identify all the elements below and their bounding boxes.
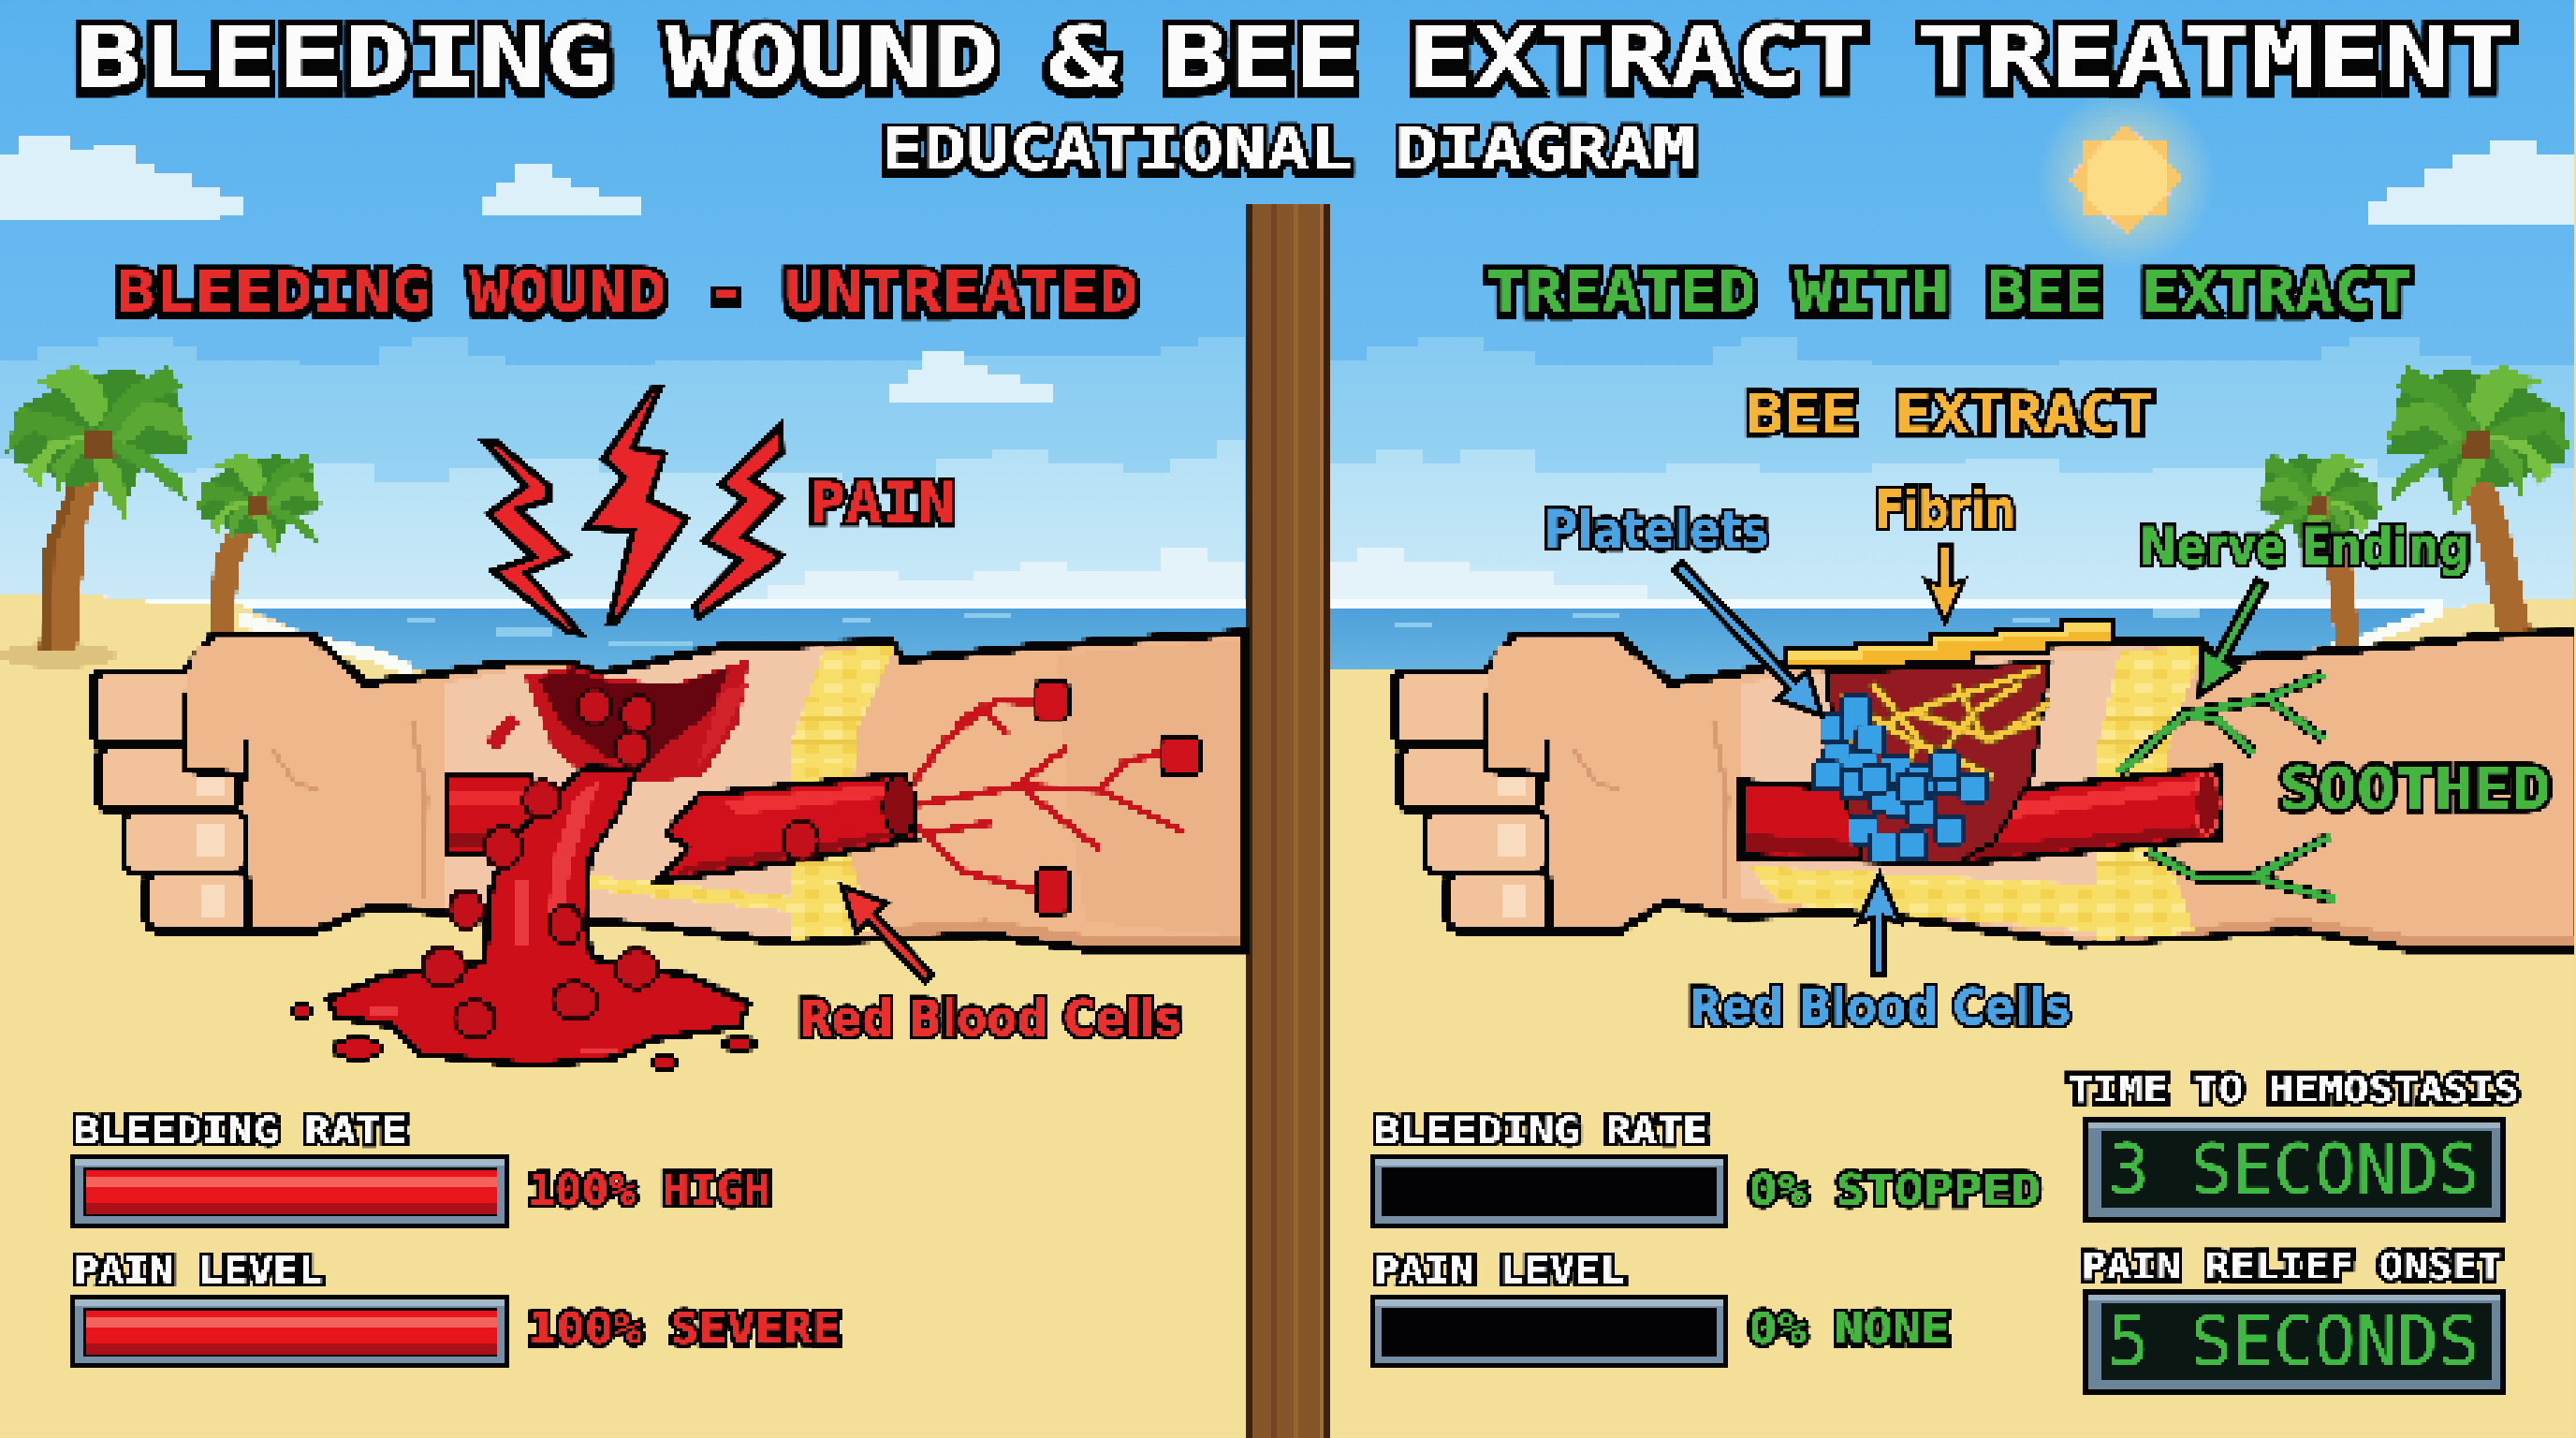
arrow: to red blood cells [842, 887, 932, 982]
severed blood vessel [447, 774, 916, 882]
label: pain: PAIN [809, 471, 955, 536]
stat: bleeding rate untreated: 100% HIGH [528, 1165, 770, 1215]
panel: treated wound [1370, 259, 2576, 1395]
cloud: middle [891, 353, 1051, 403]
main title: BEE [1163, 8, 1360, 107]
main title: BLEEDING [75, 8, 612, 107]
stat: bleeding rate untreated: BLEEDING RATE [74, 1110, 407, 1152]
hand [94, 646, 426, 931]
stat: pain level untreated: 100% SEVERE [528, 1303, 841, 1354]
illustration: healed arm [1395, 620, 2576, 948]
stat: pain level untreated [70, 1250, 841, 1368]
main title: EXTRACT [1408, 8, 1867, 107]
arrow: fibrin [1926, 546, 1964, 622]
panel: untreated wound [70, 259, 1246, 1368]
capillary end knobs [1034, 682, 1200, 914]
arrow: nerve ending [2200, 580, 2266, 695]
stat: pain level treated: 0% NONE [1749, 1303, 1950, 1354]
open wound [487, 659, 749, 786]
illustration: wounded arm [94, 633, 1246, 1070]
icon: pain lightning bolts [485, 388, 782, 633]
nerve endings [2119, 674, 2335, 900]
main title [75, 8, 2516, 107]
blood stream and pool [329, 768, 748, 1065]
label: nerve ending: Nerve Ending [2140, 517, 2470, 577]
sea [94, 605, 2443, 726]
readout: time to hemostasis: TIME TO HEMOSTASIS [2068, 1069, 2519, 1111]
fibrin mesh [1839, 669, 2050, 777]
panel heading: untreated: BLEEDING WOUND - UNTREATED [116, 259, 1138, 325]
fat layer [789, 646, 896, 940]
stat: bleeding rate treated [1370, 1110, 2041, 1228]
arrow: platelets [1675, 563, 1822, 715]
readout: time to hemostasis [2068, 1069, 2519, 1223]
label: platelets: Platelets [1544, 500, 1768, 560]
hand [1395, 646, 1727, 931]
fat layer [2097, 646, 2204, 940]
main title: TREATMENT [1917, 8, 2516, 107]
capillaries [903, 700, 1183, 891]
fibrin bandage layer [1785, 620, 2114, 670]
palm tree: small left [195, 452, 322, 637]
label: red blood cells: Red Blood Cells [1689, 979, 2071, 1036]
readout: pain relief onset [2082, 1246, 2506, 1395]
red blood cells [423, 688, 819, 1038]
label: soothed: SOOTHED [2279, 755, 2551, 823]
arrow: red blood cells [1859, 875, 1900, 974]
cloud: top right [2368, 139, 2576, 225]
label: bee extract: BEE EXTRACT [1747, 382, 2154, 446]
blood droplets [293, 1005, 754, 1070]
stat: pain level treated: PAIN LEVEL [1374, 1250, 1625, 1292]
label: red blood cells: Red Blood Cells [798, 990, 1181, 1048]
main title: WOUND [666, 8, 999, 107]
label: fibrin: Fibrin [1875, 479, 2015, 539]
readout: pain relief onset: PAIN RELIEF ONSET [2082, 1246, 2502, 1288]
cloud: small left [480, 165, 640, 214]
stat: bleeding rate untreated [70, 1110, 770, 1228]
stat: bleeding rate treated: 0% STOPPED [1749, 1165, 2041, 1215]
stat: bleeding rate treated: BLEEDING RATE [1374, 1110, 1708, 1152]
center divider post [1246, 204, 1330, 1438]
stat: pain level untreated: PAIN LEVEL [74, 1250, 323, 1292]
platelets [1812, 695, 1988, 861]
main title: & [1047, 8, 1119, 107]
panel heading: treated: TREATED WITH BEE EXTRACT [1486, 259, 2411, 325]
sand [0, 595, 1246, 1438]
readout: pain relief onset: 5 SECONDS [2108, 1302, 2480, 1382]
blood vessel [1741, 768, 2219, 863]
cloud: top left [0, 134, 245, 220]
stat: pain level treated [1370, 1250, 1950, 1368]
readout: time to hemostasis: 3 SECONDS [2108, 1130, 2480, 1210]
sun [2037, 90, 2215, 268]
palm tree: large left [0, 364, 192, 668]
palm tree: small right [2256, 452, 2383, 646]
wound cavity [1825, 663, 2050, 863]
subtitle: EDUCATIONAL DIAGRAM [881, 115, 1695, 183]
palm tree: large right [2385, 364, 2572, 638]
